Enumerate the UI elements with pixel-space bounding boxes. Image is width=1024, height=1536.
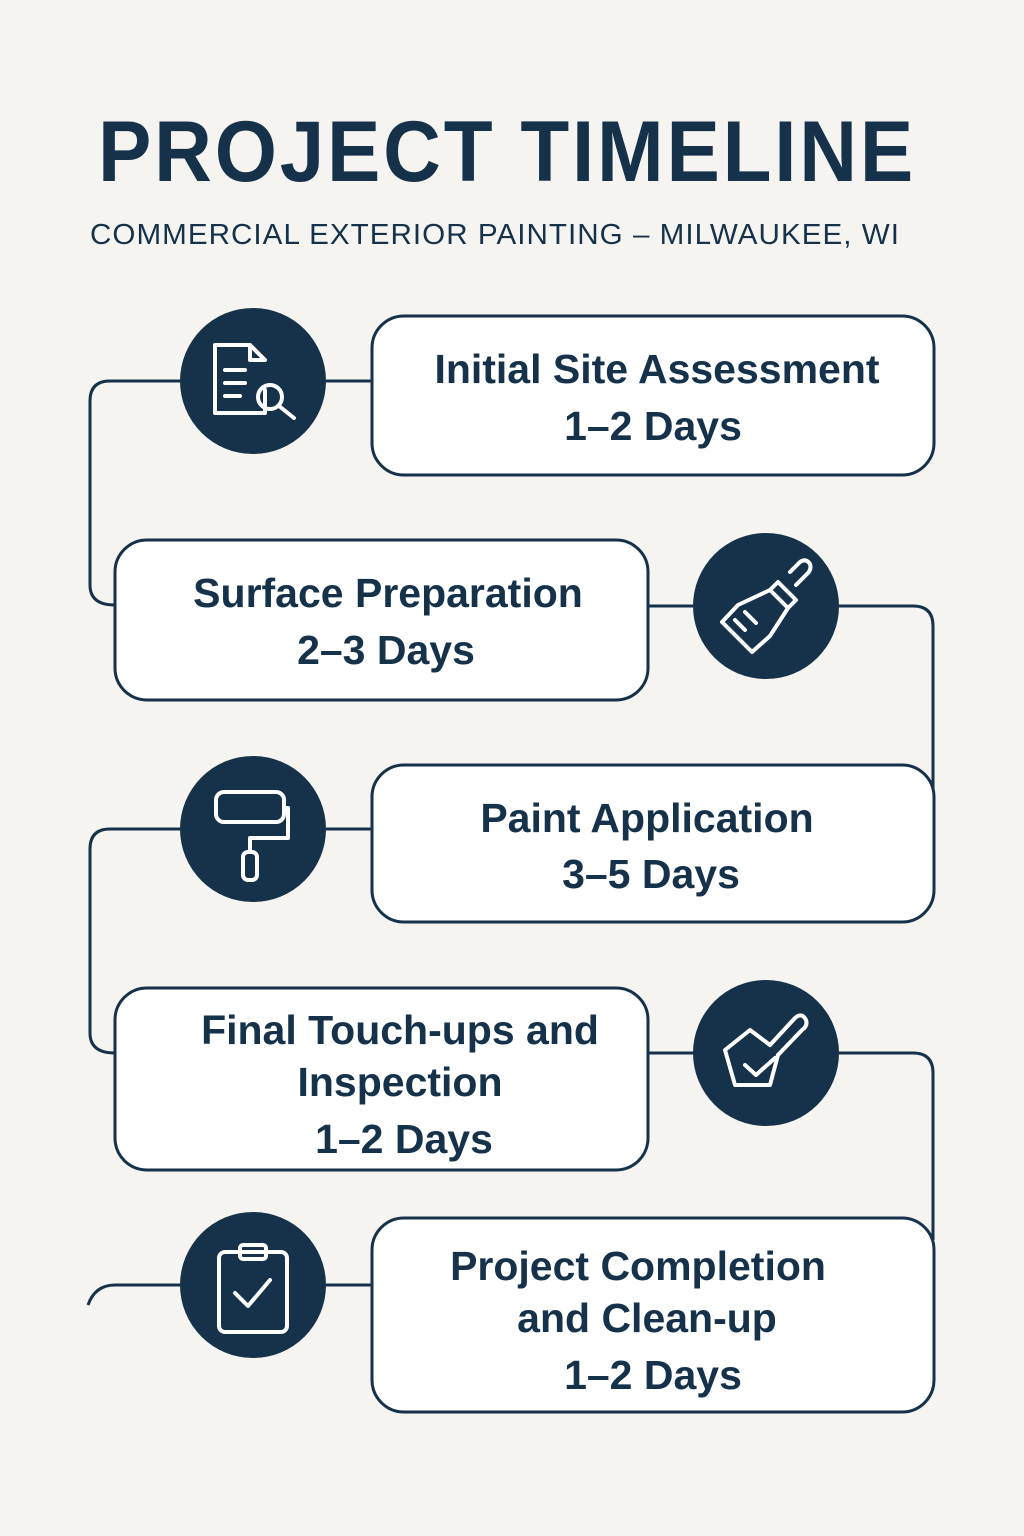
icon: clipboard check — [180, 1212, 326, 1358]
step 2 box — [115, 540, 648, 700]
step 5 box — [372, 1218, 934, 1412]
icon: document search — [180, 308, 326, 454]
step 4 box: Inspection — [297, 1059, 503, 1105]
icon: touch-up check — [693, 980, 839, 1126]
connectors — [88, 381, 933, 1305]
step 4 box: Final Touch-ups and — [201, 1007, 599, 1053]
step 4 box: 1–2 Days — [315, 1116, 493, 1162]
step 1 box: Initial Site Assessment — [434, 346, 880, 392]
step 4 box — [115, 988, 648, 1170]
icon: roller — [180, 756, 326, 902]
step 3 box: 3–5 Days — [562, 851, 740, 897]
step 2 box: 2–3 Days — [297, 627, 475, 673]
step 3 box: Paint Application — [480, 795, 814, 841]
step 5 box: and Clean-up — [517, 1295, 777, 1341]
icon: brush — [693, 533, 839, 679]
subtitle: COMMERCIAL EXTERIOR PAINTING – MILWAUKEE, WI — [90, 219, 900, 251]
step 3 box — [372, 765, 934, 922]
step 1 box: 1–2 Days — [564, 403, 742, 449]
title: PROJECT TIMELINE — [98, 104, 916, 200]
step 2 box: Surface Preparation — [193, 570, 583, 616]
step 1 box — [372, 316, 934, 475]
step 5 box: Project Completion — [450, 1243, 826, 1289]
step 5 box: 1–2 Days — [564, 1352, 742, 1398]
